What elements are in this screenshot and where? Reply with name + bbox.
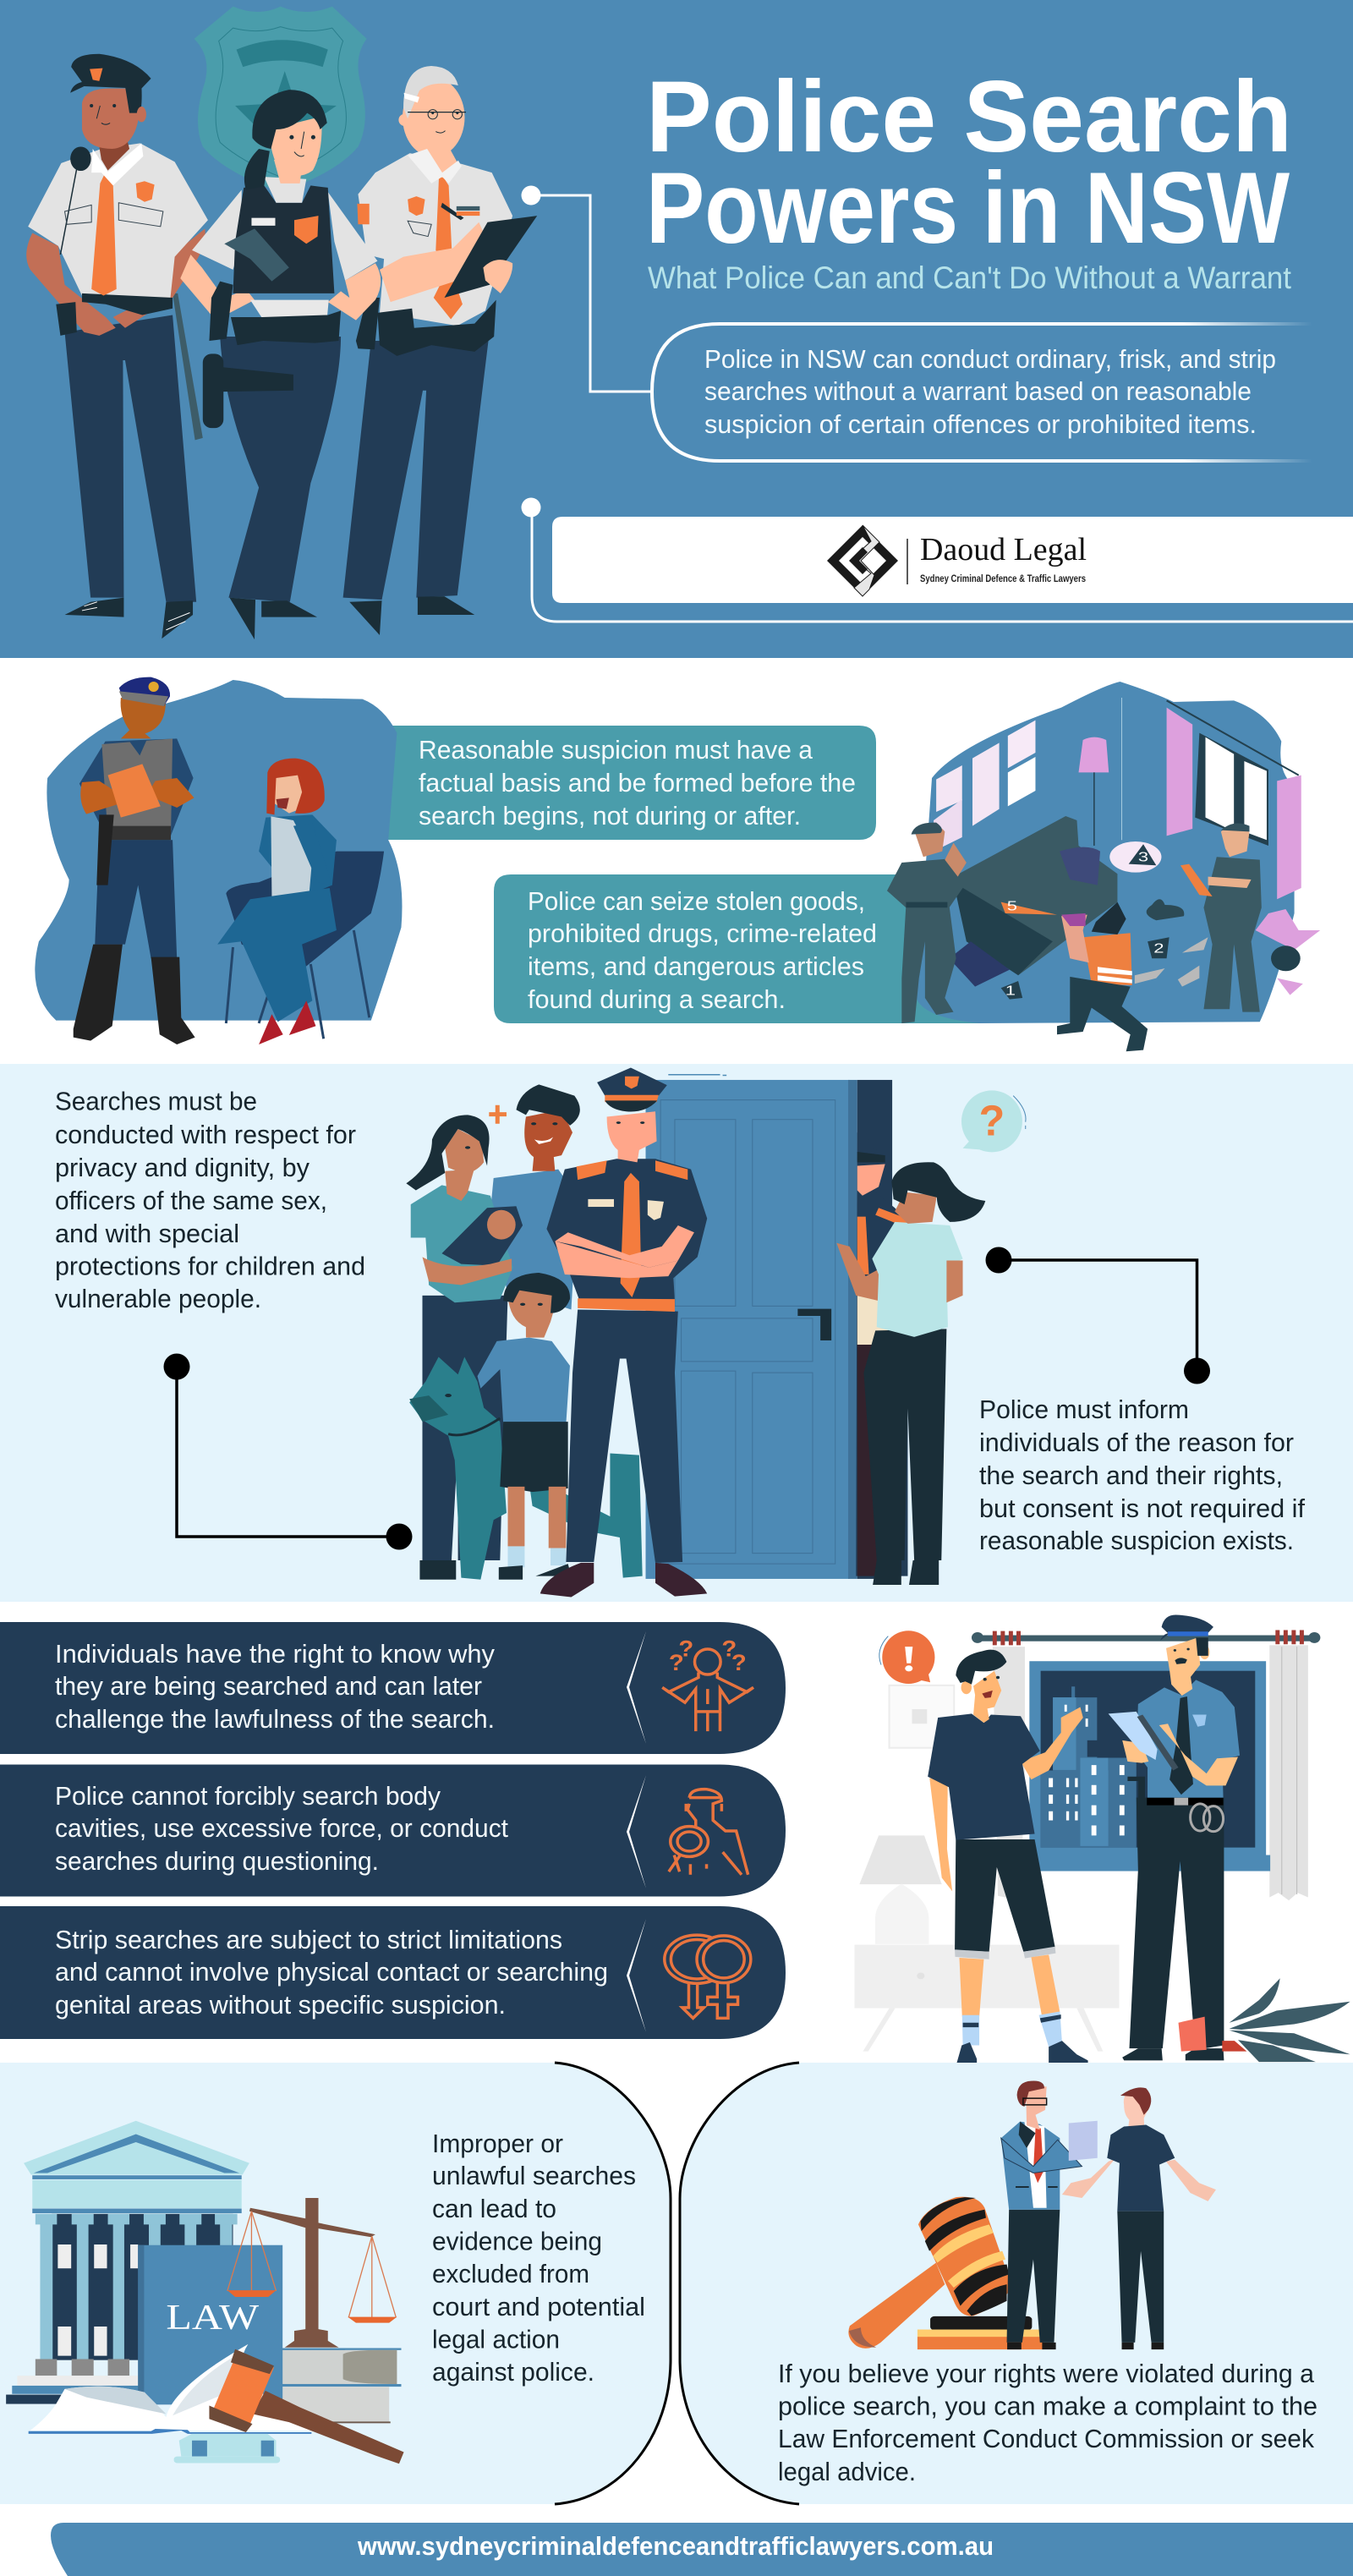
callout: strip search limits: genital areas without specific suspicion. [55, 1990, 506, 2020]
text: brand name: Daoud Legal [920, 532, 1087, 567]
illustration: crime scene search in a living room [887, 682, 1320, 1051]
text: consequences: excluded from [432, 2259, 589, 2288]
icon: law book [138, 2245, 282, 2404]
title: Police Search [646, 60, 1292, 173]
panel: hero header [0, 0, 1353, 658]
icon: gavel [174, 2349, 404, 2464]
panel: conduct of searches [0, 1064, 1353, 1602]
figure: young man [928, 1650, 1088, 2065]
subtitle: What Police Can and Can't Do Without a Warrant [648, 260, 1292, 295]
text: complaint advice [778, 2359, 1317, 2486]
callout: seizure of items: items, and dangerous articles [528, 951, 864, 981]
text: consequences: against police. [432, 2357, 594, 2387]
text: duty to inform [979, 1395, 1305, 1555]
text: summary: suspicion of certain offences or prohibited items. [704, 409, 1257, 439]
figure: officer behind door [856, 1131, 911, 1576]
footer bar with website [51, 2523, 1353, 2576]
callout: strip search limits [0, 1906, 786, 2039]
icon: fallen plant [1179, 1978, 1350, 2062]
callout: seizure of items [494, 874, 981, 1023]
icon: sofa and pillows [949, 816, 1117, 987]
icon: orange gavel [848, 2197, 1044, 2349]
panel: left consequences [0, 2063, 671, 2504]
text: complaint advice: If you believe your rights were violated during a [778, 2359, 1315, 2388]
callout: summary bracket [652, 324, 1312, 461]
text: duty to inform: the search and their rights, [979, 1461, 1283, 1490]
callout: strip search limits: Strip searches are subject to strict limitations [55, 1925, 562, 1954]
icon: Daoud Legal diamond logo [827, 525, 898, 596]
callout: reasonable suspicion [372, 726, 876, 840]
icon: faded room furniture [855, 1685, 1119, 2052]
icon: window and curtains [1167, 700, 1301, 899]
illustration: officer questioning a seated woman [35, 677, 403, 1044]
figure: child [478, 1273, 572, 1580]
text: respect for privacy and dignity: privacy and dignity, by [55, 1153, 309, 1182]
panel: rights and limits [0, 1614, 1350, 2065]
text: summary [704, 344, 1276, 439]
icon: courthouse [6, 2121, 249, 2404]
figure: dog [409, 1357, 643, 1580]
callout: reasonable suspicion: Reasonable suspicion must have a [419, 735, 813, 765]
text: respect for privacy and dignity: officers of the same sex, [55, 1186, 327, 1215]
icon: evidence markers [1001, 841, 1208, 1000]
text: consequences: can lead to [432, 2194, 556, 2223]
figure: main officer [540, 1067, 707, 1597]
callout: prohibited conduct [0, 1764, 786, 1896]
text: brand tagline: Sydney Criminal Defence & Traffic Lawyers [920, 573, 1086, 584]
text: respect for privacy and dignity [55, 1086, 365, 1313]
figure: man behind family [490, 1084, 580, 1310]
icon: potted pink plant [1256, 909, 1320, 995]
text: duty to inform: Police must inform [979, 1395, 1189, 1424]
icon: window with city skyline [1029, 1661, 1270, 1871]
text: respect for privacy and dignity: vulnerable people. [55, 1284, 261, 1313]
icon: alert speech bubble [879, 1631, 934, 1684]
illustration: officer questioning a young man at a window [855, 1614, 1350, 2065]
figure: woman at door [836, 1162, 985, 1585]
text: consequences: legal action [432, 2324, 560, 2354]
icon: question speech bubble [961, 1090, 1026, 1152]
callout: reasonable suspicion: factual basis and be formed before the [419, 768, 856, 797]
callout: seizure of items: prohibited drugs, crime-related [528, 918, 877, 948]
icon: floor lamp [1079, 737, 1109, 846]
icon: evidence markers: 5 [1007, 898, 1017, 913]
callout: reasonable suspicion: search begins, not during or after. [419, 801, 801, 830]
panel: right complaints [680, 2063, 1353, 2504]
text: complaint advice: legal advice. [778, 2457, 916, 2486]
figure: woman holding baby [406, 1115, 523, 1580]
connector: officers to summary [521, 186, 652, 392]
callout: right to know: challenge the lawfulness of the search. [55, 1704, 495, 1734]
callout: prohibited conduct: cavities, use excessive force, or conduct [55, 1813, 508, 1843]
figure: lawyer [1001, 2081, 1098, 2349]
footer bar with website: www.sydneycriminaldefenceandtrafficlawyers.com.au [357, 2531, 994, 2561]
text: consequences: court and potential [432, 2292, 645, 2321]
text: consequences: Improper or [432, 2129, 563, 2158]
callout: right to know: Individuals have the right to know why [55, 1639, 495, 1669]
icon: open book [29, 2344, 311, 2434]
text: complaint advice: Law Enforcement Conduct Commission or seek [778, 2424, 1314, 2453]
figure: seated woman and chair [217, 759, 384, 1044]
icon: law book: LAW [166, 2297, 260, 2338]
illustration: officer, family and door [406, 1067, 1026, 1597]
text: respect for privacy and dignity: Searches must be [55, 1086, 257, 1116]
text: respect for privacy and dignity: conducted with respect for [55, 1120, 356, 1149]
illustration: courthouse, law book, scales and gavel [6, 2121, 404, 2464]
icon: door [646, 1075, 892, 1579]
icon: confused person with question marks: ? [669, 1650, 684, 1675]
connector: left black line [164, 1353, 413, 1549]
icon: evidence markers: 2 [1153, 940, 1164, 956]
callout: prohibited conduct: searches during questioning. [55, 1846, 379, 1876]
callout: right to know: they are being searched and can later [55, 1671, 482, 1701]
icon: question speech bubble: ? [979, 1098, 1005, 1145]
connector: right black line [986, 1247, 1210, 1384]
text: complaint advice: police search, you can make a complaint to the [778, 2392, 1317, 2420]
text: consequences: evidence being [432, 2226, 602, 2256]
text: duty to inform: reasonable suspicion exists. [979, 1526, 1294, 1555]
text: summary: searches without a warrant based on reasonable [704, 376, 1252, 406]
text: consequences: unlawful searches [432, 2161, 636, 2190]
icon: gender symbols [665, 1935, 751, 2018]
icon: picture frames [934, 721, 1035, 852]
title [646, 60, 1292, 265]
text: respect for privacy and dignity: protections for children and [55, 1252, 365, 1280]
illustration: lawyer, client and gavel [848, 2081, 1216, 2349]
figure: crouching investigator [1057, 902, 1148, 1051]
icon: evidence markers: 1 [1005, 983, 1016, 998]
panel: reasonable suspicion and seizure [35, 677, 1320, 1051]
text: consequences [432, 2129, 645, 2387]
text: duty to inform: but consent is not required if [979, 1494, 1305, 1523]
icon: curtains and rail [972, 1630, 1320, 1900]
figure: officer with clipboard [74, 677, 195, 1044]
callout: right to know [0, 1622, 786, 1754]
callout: seizure of items: found during a search. [528, 984, 786, 1014]
text: duty to inform: individuals of the reason for [979, 1428, 1294, 1457]
figure: officer middle [180, 90, 381, 639]
callout: strip search limits: and cannot involve physical contact or searching [55, 1957, 608, 1987]
callout: seizure of items: Police can seize stolen goods, [528, 886, 865, 916]
text: summary: Police in NSW can conduct ordinary, frisk, and strip [704, 344, 1276, 374]
text: respect for privacy and dignity: and with special [55, 1219, 239, 1248]
figure: officer [1109, 1614, 1240, 2060]
figure: officer at right with clipboard [1180, 823, 1262, 1012]
icon: stack of books [242, 2349, 401, 2423]
callout: prohibited conduct: Police cannot forcibly search body [55, 1781, 441, 1811]
icon: police badge backdrop [194, 7, 367, 192]
connector: logo [521, 497, 1353, 622]
icon: scales of justice [227, 2198, 397, 2348]
icon: confused person with question marks [662, 1636, 753, 1731]
figure: officer left [26, 54, 208, 639]
illustration: three police officers with badge [26, 7, 537, 639]
icon: confused person with question marks: ? [678, 1636, 693, 1662]
icon: person and magnifying glass [669, 1789, 748, 1875]
panel: logo box [552, 517, 1353, 603]
icon: evidence markers: 3 [1138, 849, 1148, 864]
figure: officer right [343, 66, 537, 635]
panel: consequences and complaints [0, 2063, 1353, 2504]
icon: confused person with question marks: ? [721, 1636, 737, 1662]
figure: client [1062, 2087, 1216, 2349]
icon: confused person with question marks: ? [731, 1650, 747, 1675]
figure: officer at left with radio [887, 823, 967, 1023]
